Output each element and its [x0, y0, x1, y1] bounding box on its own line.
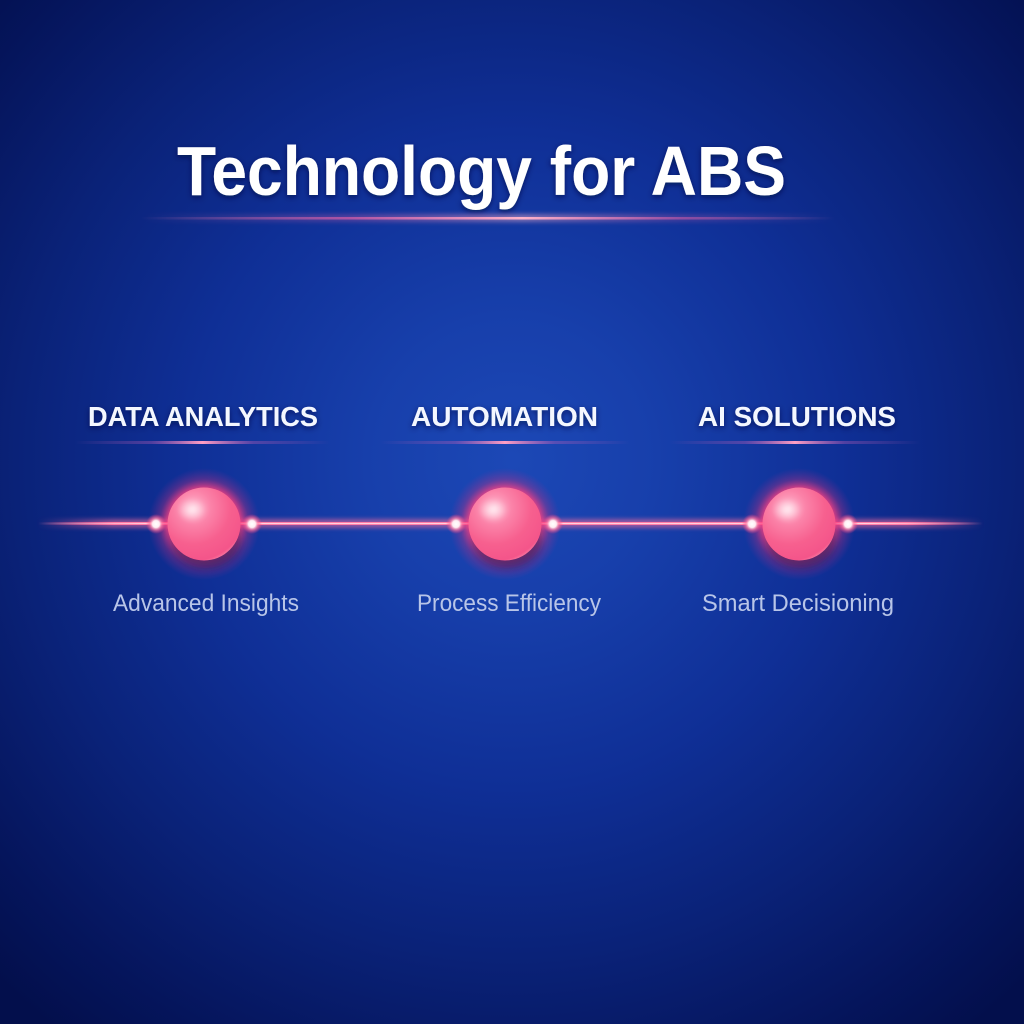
heading underline — [670, 441, 920, 444]
milestone: ai solutions — [670, 401, 920, 617]
heading: ai solutions: AI SOLUTIONS — [698, 401, 896, 432]
sphere node — [146, 468, 262, 580]
caption: Advanced Insights — [113, 590, 299, 617]
heading: automation: AUTOMATION — [411, 401, 598, 432]
heading underline — [75, 441, 330, 444]
heading: data analytics: DATA ANALYTICS — [88, 401, 318, 432]
milestone: data analytics — [75, 401, 330, 617]
caption: Smart Decisioning — [702, 590, 894, 617]
sphere node — [446, 468, 563, 580]
heading underline — [380, 441, 630, 444]
caption: Process Efficiency — [417, 590, 601, 617]
connector line — [38, 519, 983, 528]
title: Technology for ABS — [177, 132, 786, 210]
milestone: automation — [380, 401, 630, 617]
title underline — [140, 214, 835, 222]
sphere node — [742, 468, 858, 580]
